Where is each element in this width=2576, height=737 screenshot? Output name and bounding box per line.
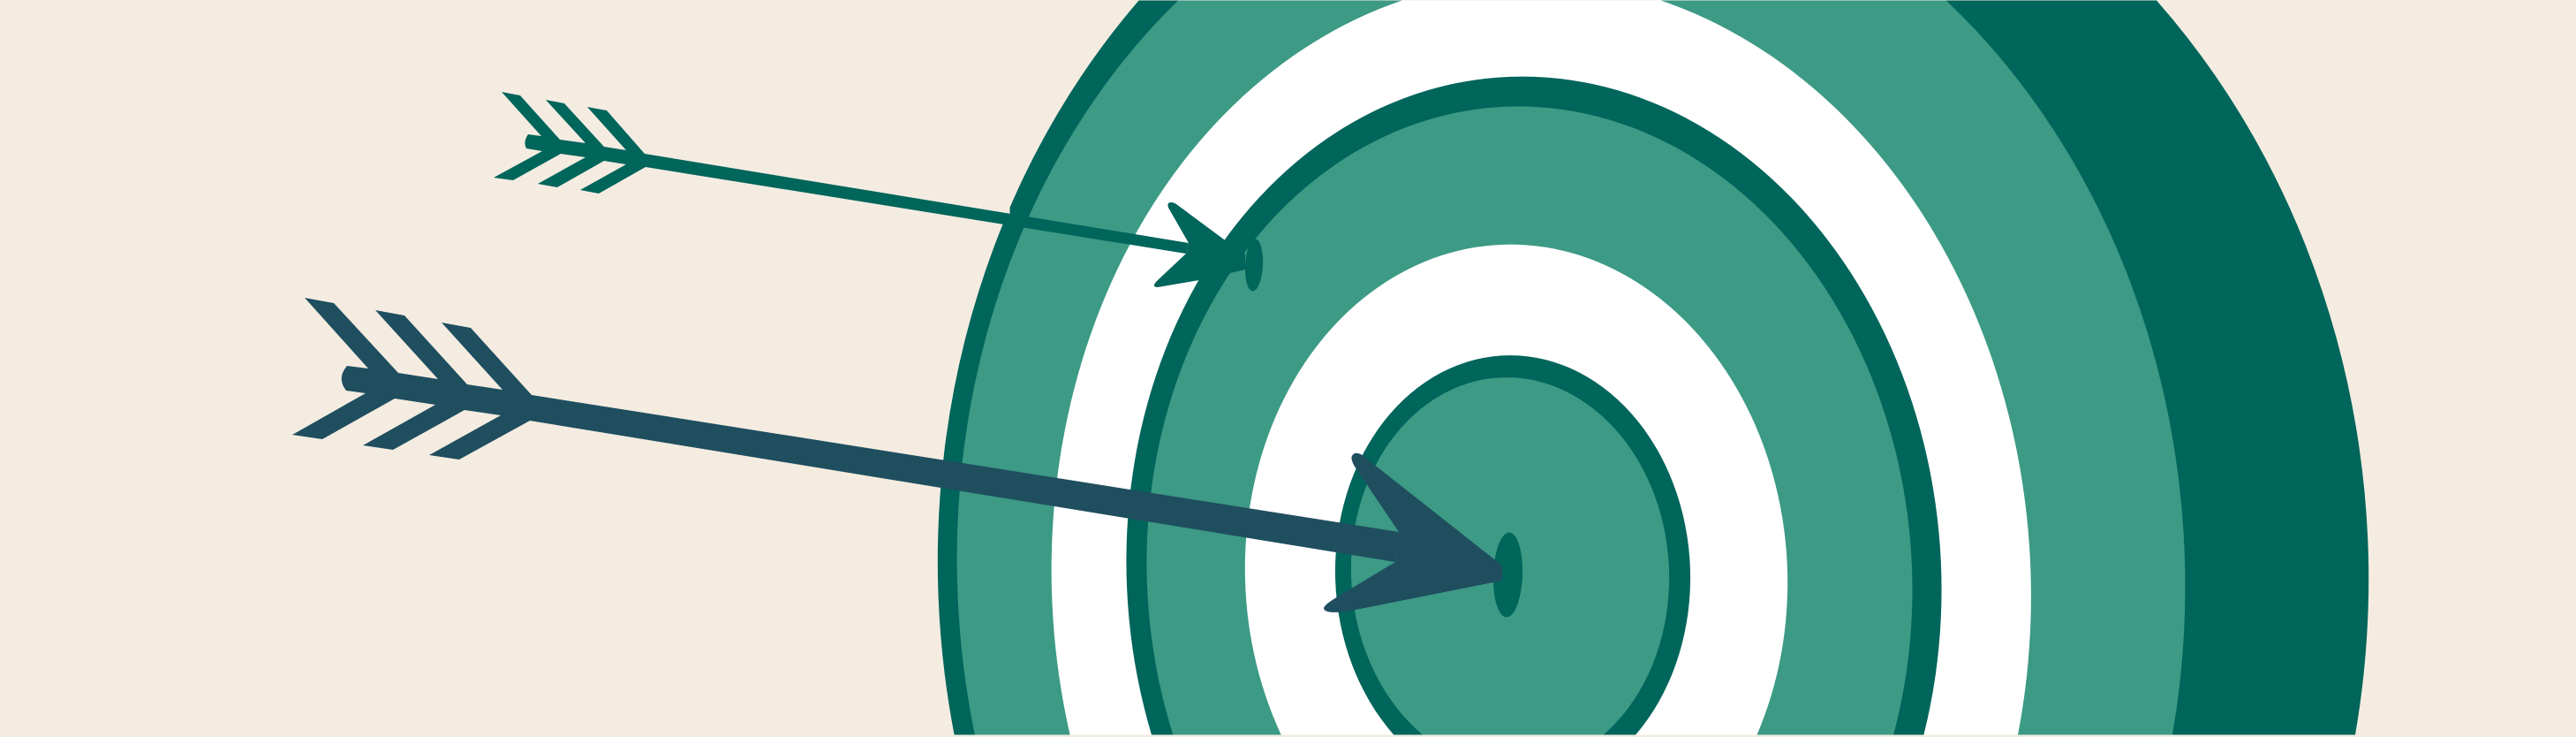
target: bullseye [1351, 377, 1669, 735]
target: inner white ring [1245, 245, 1787, 735]
small arrow shaft and fletching [494, 92, 1189, 254]
small arrow head [1154, 202, 1245, 287]
target: light green outer ring [957, 0, 2185, 735]
big arrow head [1324, 453, 1502, 612]
target board [938, 0, 2368, 735]
big arrow [292, 298, 1524, 618]
big arrow shaft and fletching [292, 298, 1399, 562]
small arrow [494, 92, 1265, 292]
target: bullseye rim [1335, 355, 1690, 735]
target: dark ring [1126, 77, 1942, 734]
target: white ring [1052, 0, 2031, 735]
small arrow hole [1243, 239, 1265, 292]
big arrow hole [1492, 532, 1524, 618]
target: dark outer body [938, 0, 2368, 735]
target: green ring [1146, 106, 1913, 735]
